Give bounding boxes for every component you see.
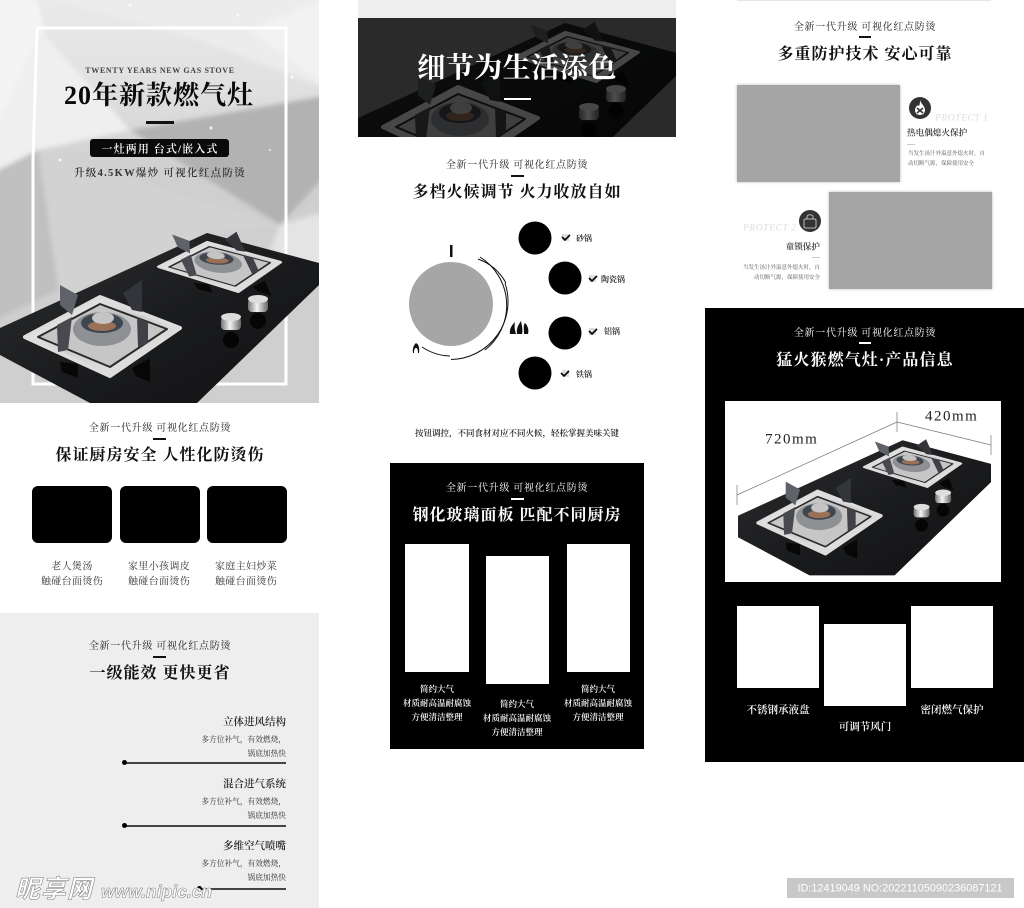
pot label iron: 铁锅 [576, 370, 592, 379]
banner: details [358, 18, 676, 137]
feature text [201, 859, 286, 882]
caption three [215, 560, 277, 587]
feature text: 锅底加热快 [248, 873, 286, 882]
feature title: 立体进风结构 [223, 717, 286, 728]
pot label sand: 砂锅 [576, 234, 592, 243]
feature line [124, 825, 286, 827]
protect two text: 当发生汤汁外溢意外熄火时，自 [743, 265, 820, 271]
feature line [200, 888, 286, 890]
caption middle: 材质耐高温耐腐蚀 [483, 713, 551, 723]
protect one label: PROTECT 1 [935, 113, 989, 123]
panel: product info [705, 308, 1024, 762]
feature dot [197, 886, 202, 891]
caption right: 方便清洁整理 [572, 712, 624, 722]
section bar [511, 175, 524, 177]
caption one [41, 560, 103, 587]
hero tagline: 升级4.5KW爆炒 可视化红点防烫 [74, 168, 246, 179]
feature text [201, 797, 286, 820]
depth label: 420mm [925, 408, 978, 424]
feature text: 锅底加热快 [248, 749, 286, 758]
tile caption right: 密闭燃气保护 [920, 705, 984, 716]
English subtitle: TWENTY YEARS NEW GAS STOVE [85, 66, 235, 75]
white tile right [567, 544, 630, 672]
section heading: 一级能效 更快更省 [89, 665, 231, 682]
caption one: 触碰台面烫伤 [41, 576, 103, 587]
feature line [124, 762, 286, 764]
hero title: 20年新款燃气灶 [64, 81, 254, 110]
hero faceted background [0, 0, 319, 317]
product photo [725, 401, 1001, 582]
grey photo one [737, 85, 900, 182]
section subtitle: 全新一代升级 可视化红点防烫 [446, 160, 588, 171]
caption two: 家里小孩调皮 [128, 562, 190, 572]
dial diagram [409, 222, 598, 390]
section subtitle: 全新一代升级 可视化红点防烫 [89, 641, 231, 652]
feature text [201, 735, 286, 758]
panel: hero [0, 0, 319, 403]
card two [120, 486, 200, 543]
panel: tempered glass [390, 463, 644, 749]
watermark logo: 昵享网 www.nipic.cn [15, 876, 212, 904]
protect two dash [812, 257, 820, 258]
section heading: 钢化玻璃面板 匹配不同厨房 [412, 507, 622, 524]
white tile middle [824, 624, 906, 706]
dial caption: 按钮调控，不同食材对应不同火候，轻松掌握美味关键 [415, 428, 619, 438]
feature three [197, 840, 286, 891]
section heading: 猛火猴燃气灶·产品信息 [776, 352, 954, 369]
feature title: 多维空气喷嘴 [223, 841, 286, 852]
protect two text: 动切断气源，保障使用安全 [754, 275, 820, 281]
icon: flame [909, 97, 931, 119]
section bar [511, 498, 524, 500]
feature one [122, 716, 286, 765]
feature dot [122, 760, 127, 765]
protect one text: 当发生汤汁外溢意外熄火时，自 [908, 151, 985, 157]
card one [32, 486, 112, 543]
tile caption middle: 可调节风门 [839, 722, 891, 733]
protect one dash [907, 144, 915, 145]
caption one: 老人煲汤 [51, 562, 93, 572]
panel: protection [735, 0, 994, 291]
section bar [859, 342, 871, 344]
feature text: 多方位补气，有效燃烧， [201, 859, 286, 868]
protect two label: PROTECT 2 [743, 223, 797, 233]
section bar [153, 438, 166, 440]
stove with dimensions [736, 412, 992, 576]
caption middle: 方便清洁整理 [491, 727, 543, 737]
protect one text: 动切断气源，保障使用安全 [908, 161, 974, 167]
white tile left [737, 606, 819, 688]
feature title: 混合进气系统 [223, 779, 286, 790]
white frame [32, 26, 288, 386]
top edge [737, 0, 991, 1]
section heading: 多重防护技术 安心可靠 [777, 46, 953, 63]
top strip [358, 0, 676, 18]
white tile left [405, 544, 469, 672]
caption middle: 简约大气 [500, 699, 534, 709]
tile caption left: 不锈钢承液盘 [746, 705, 810, 716]
watermark id bar: ID:12419049 NO:20221105090236087121 [797, 883, 1003, 895]
caption three: 触碰台面烫伤 [215, 576, 277, 587]
watermark id bar [787, 878, 1014, 898]
pot label ceramic: 陶瓷锅 [601, 275, 625, 284]
panel: flame control [409, 159, 625, 438]
caption middle [483, 699, 551, 737]
caption left [403, 684, 471, 722]
section heading: 多档火候调节 火力收放自如 [412, 184, 622, 201]
panel: energy efficiency [0, 613, 319, 908]
section subtitle: 全新一代升级 可视化红点防烫 [794, 22, 936, 33]
section bar [859, 36, 871, 38]
pill label [90, 139, 229, 157]
protect one title: 热电偶熄火保护 [907, 128, 967, 138]
width label: 720mm [765, 432, 818, 448]
icon: lock [799, 210, 821, 232]
section bar [153, 656, 166, 658]
caption right: 材质耐高温耐腐蚀 [564, 698, 632, 708]
banner title: 细节为生活添色 [417, 53, 617, 84]
feature text: 多方位补气，有效燃烧， [201, 797, 286, 806]
caption left: 材质耐高温耐腐蚀 [403, 698, 471, 708]
caption two [128, 560, 190, 587]
white tile right [911, 606, 993, 688]
stove photo [0, 232, 319, 403]
section subtitle: 全新一代升级 可视化红点防烫 [446, 483, 588, 494]
caption right [564, 684, 632, 722]
title bar [146, 121, 174, 124]
section heading: 保证厨房安全 人性化防烫伤 [55, 447, 265, 464]
pill label: 一灶两用 台式/嵌入式 [102, 144, 218, 156]
dimmed stove photo [358, 22, 676, 137]
feature text: 锅底加热快 [248, 811, 286, 820]
grey photo two [829, 192, 992, 289]
pot label aluminium: 铝锅 [604, 327, 620, 336]
feature dot [122, 823, 127, 828]
caption left: 方便清洁整理 [411, 712, 463, 722]
caption three: 家庭主妇炒菜 [215, 562, 277, 572]
banner bar [504, 98, 531, 100]
caption two: 触碰台面烫伤 [128, 576, 190, 587]
section subtitle: 全新一代升级 可视化红点防烫 [794, 328, 936, 339]
section subtitle: 全新一代升级 可视化红点防烫 [89, 423, 231, 434]
caption right: 简约大气 [581, 684, 615, 694]
card three [207, 486, 287, 543]
protect two text [743, 264, 820, 281]
panel: kitchen safety [32, 422, 287, 587]
protect two title: 童锁保护 [786, 242, 820, 252]
protect one text [908, 150, 985, 167]
white tile middle [486, 556, 549, 684]
feature two [122, 778, 286, 828]
feature text: 多方位补气，有效燃烧， [201, 735, 286, 744]
caption left: 简约大气 [420, 684, 454, 694]
